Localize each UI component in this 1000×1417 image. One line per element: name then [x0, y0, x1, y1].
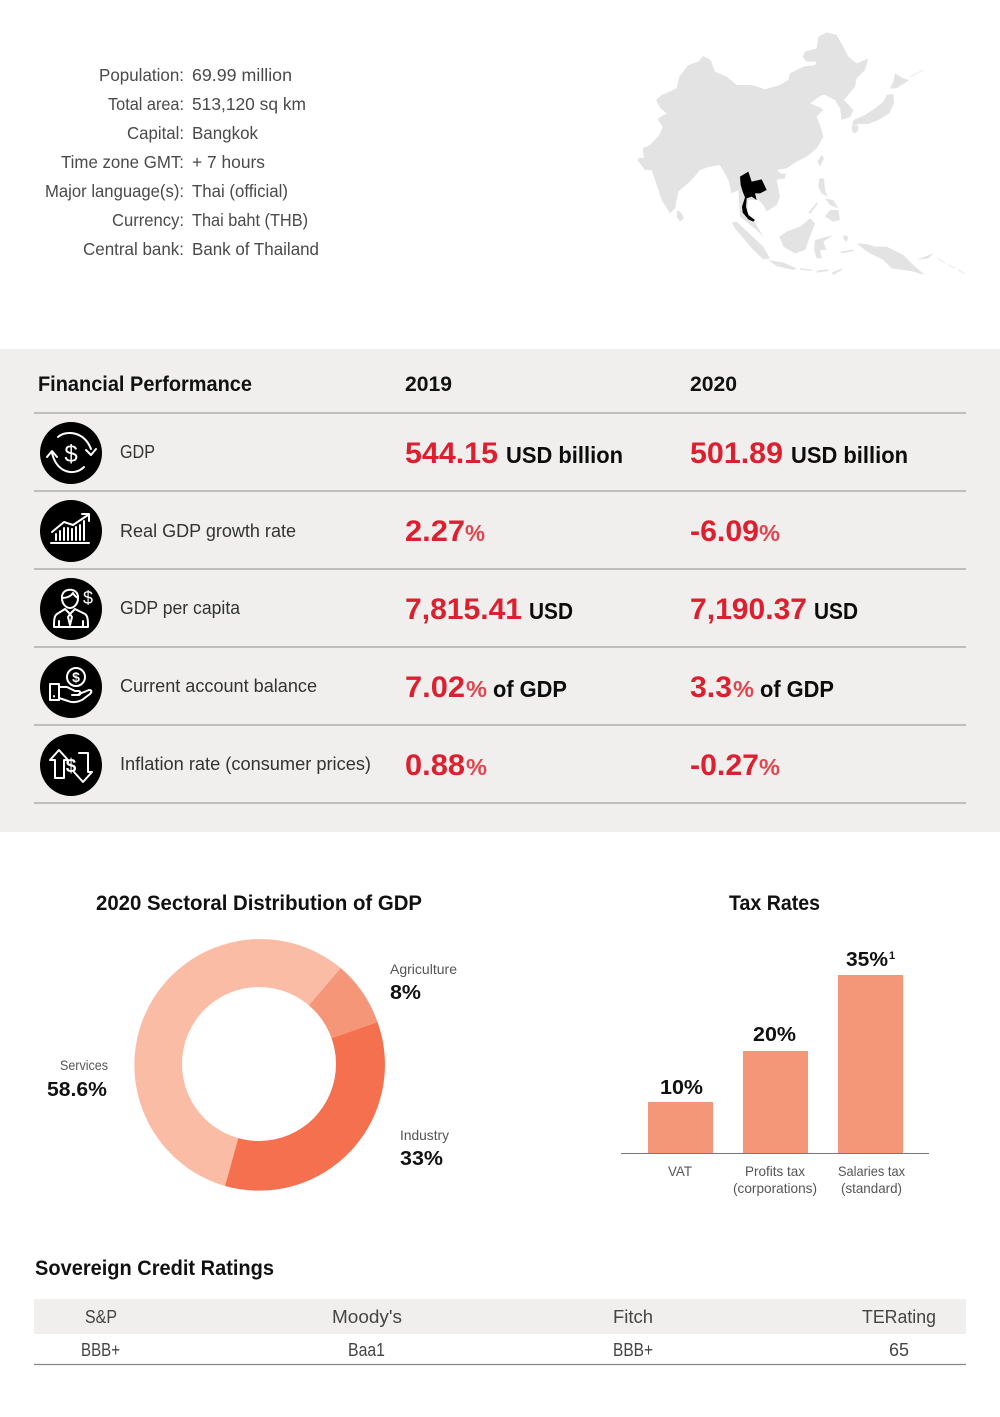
table: credit ratings: 65: [889, 1340, 909, 1360]
heading: sovereign credit ratings: Sovereign Credit Ratings: [35, 1257, 274, 1280]
table heading row: [38, 373, 737, 396]
icon: businessman with dollar: [40, 578, 102, 640]
table heading row: 2020: [690, 373, 737, 396]
icon: dollar with circular arrows: [40, 422, 102, 484]
heading: tax rates: Tax Rates: [729, 892, 820, 915]
table: credit ratings: BBB+: [81, 1340, 120, 1360]
row: inflation rate: -0.27: [690, 749, 759, 782]
bar chart: tax rates: [621, 949, 929, 1196]
country facts list: Thai (official): [192, 181, 288, 201]
country facts list: Bank of Thailand: [192, 239, 319, 259]
country facts list: 69.99 million: [192, 65, 292, 85]
row: GDP: [40, 422, 908, 484]
country facts list: Currency:: [112, 210, 184, 230]
table: credit ratings: [34, 1299, 966, 1364]
label: agriculture: 8%: [390, 982, 421, 1004]
row: GDP per capita: 7,190.37: [690, 593, 807, 626]
table: credit ratings: Baa1: [348, 1340, 385, 1360]
bar chart: tax rates: Profits tax: [745, 1163, 805, 1179]
label: services: [47, 1057, 108, 1101]
row: current account balance: of GDP: [760, 676, 834, 702]
country facts list: Central bank:: [83, 239, 184, 259]
row: GDP per capita: USD: [529, 598, 573, 624]
row: current account balance: 3.3: [690, 671, 732, 704]
row: current account balance: 7.02: [405, 671, 465, 704]
table: credit ratings: S&P: [85, 1307, 117, 1327]
icon: up and down arrows with dollar: [40, 734, 102, 796]
icon: businessman with dollar: $: [83, 588, 93, 608]
country facts list: Total area:: [108, 94, 184, 114]
row: current account balance: [40, 656, 834, 718]
icon: hand holding coin: [40, 656, 102, 718]
label: agriculture: [390, 961, 457, 1004]
bar chart: tax rates: (standard): [841, 1180, 902, 1196]
map of Asia with Thailand highlighted: [637, 32, 965, 275]
row: inflation rate: %: [466, 754, 487, 780]
label: industry: [400, 1127, 449, 1170]
country facts list: Bangkok: [192, 123, 258, 143]
label: services: Services: [60, 1057, 108, 1073]
bar chart: tax rates: Salaries tax: [838, 1163, 905, 1179]
row: inflation rate: 0.88: [405, 749, 465, 782]
row: GDP per capita: [40, 578, 858, 640]
row: inflation rate: [40, 734, 780, 796]
row: GDP per capita: GDP per capita: [120, 598, 241, 618]
row: current account balance: Current account balance: [120, 676, 317, 696]
country facts list: [45, 65, 319, 259]
table: credit ratings: BBB+: [613, 1340, 653, 1360]
panel: financial performance: [0, 349, 1000, 832]
table: credit ratings: Fitch: [613, 1307, 653, 1327]
country facts list: 513,120 sq km: [192, 94, 306, 114]
table heading row: 2019: [405, 373, 452, 396]
country facts list: + 7 hours: [192, 152, 265, 172]
bar chart: tax rates: 35%: [846, 949, 888, 971]
label: industry: 33%: [400, 1148, 443, 1170]
row: current account balance: of GDP: [493, 676, 567, 702]
table heading row: Financial Performance: [38, 373, 252, 396]
label: agriculture: Agriculture: [390, 961, 457, 977]
row: real GDP growth rate: 2.27: [405, 515, 465, 548]
row: real GDP growth rate: %: [465, 520, 485, 546]
icon: growth chart: [40, 500, 102, 562]
country facts list: Major language(s):: [45, 181, 184, 201]
Thailand: [740, 172, 767, 222]
bar chart: tax rates: 1: [889, 950, 895, 962]
row: GDP per capita: USD: [814, 598, 858, 624]
row: real GDP growth rate: %: [759, 520, 780, 546]
table: credit ratings: TERating: [862, 1307, 936, 1327]
label: industry: Industry: [400, 1127, 449, 1143]
country facts list: Capital:: [127, 123, 184, 143]
row: GDP: USD billion: [506, 442, 623, 468]
bar chart: tax rates: 10%: [660, 1077, 703, 1099]
row: GDP: 544.15: [405, 437, 498, 470]
row: current account balance: %: [466, 676, 487, 702]
icon: hand holding coin: $: [72, 669, 80, 685]
heading: sectoral distribution: 2020 Sectoral Distribution of GDP: [96, 892, 422, 915]
row: inflation rate: Inflation rate (consumer prices): [120, 754, 371, 774]
country facts list: Time zone GMT:: [61, 152, 184, 172]
row: real GDP growth rate: [40, 500, 780, 562]
label: services: 58.6%: [47, 1079, 107, 1101]
icon: up and down arrows with dollar: $: [66, 756, 77, 777]
row: current account balance: %: [733, 676, 754, 702]
row: GDP: USD billion: [791, 442, 908, 468]
row: inflation rate: %: [759, 754, 780, 780]
row: real GDP growth rate: Real GDP growth rate: [120, 521, 296, 541]
icon: dollar with circular arrows: $: [64, 441, 78, 468]
country facts list: Population:: [99, 65, 184, 85]
bar chart: tax rates: 20%: [753, 1024, 796, 1046]
bar chart: tax rates: VAT: [668, 1163, 692, 1179]
row: GDP per capita: 7,815.41: [405, 593, 522, 626]
row: real GDP growth rate: -6.09: [690, 515, 759, 548]
donut chart: GDP by sector: [134, 939, 385, 1191]
row: GDP: 501.89: [690, 437, 783, 470]
bar chart: tax rates: (corporations): [733, 1180, 817, 1196]
table: credit ratings: Moody's: [332, 1307, 402, 1327]
country facts list: Thai baht (THB): [192, 210, 308, 230]
row: GDP: GDP: [120, 442, 155, 462]
